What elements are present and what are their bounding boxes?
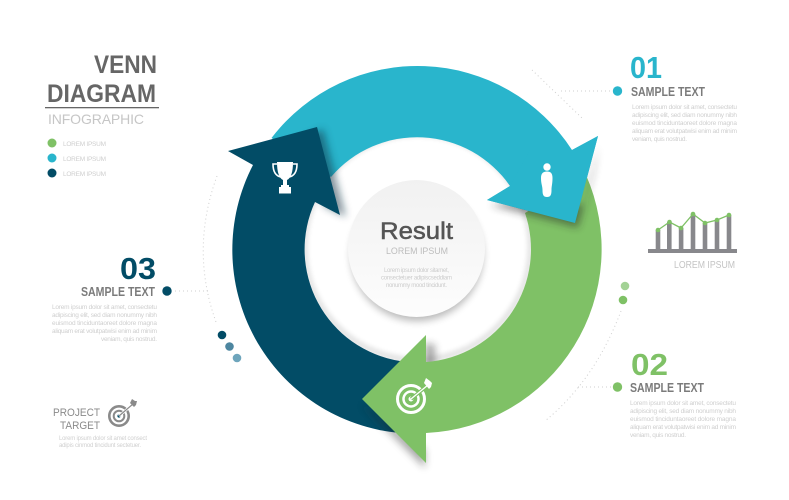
section 03: 03: [120, 251, 156, 286]
arrow: green: [362, 175, 602, 463]
section 02: aliquam erat volutpatwisi enim ad minim: [630, 424, 736, 431]
title: VENN: [94, 51, 157, 79]
section 03: [52, 176, 241, 362]
section 03: aliquam erat volutpatwisi enim ad minim: [52, 328, 157, 335]
icon: target grey: [109, 399, 137, 426]
project target: PROJECT: [53, 407, 100, 419]
icon: trophy: [273, 162, 297, 194]
chart: bars and line: [648, 212, 737, 271]
section 02: [545, 282, 736, 439]
icon: person: [541, 163, 552, 197]
section 01: Lorem ipsum dolor sit amet, consectetu: [632, 104, 737, 111]
icon: target white: [398, 378, 432, 412]
section 01: SAMPLE TEXT: [631, 84, 705, 99]
section 03: adipiscing elit, sed diam nonummy nibh: [52, 312, 157, 319]
title: [45, 51, 159, 127]
project target: [53, 399, 147, 449]
section 01: veniam, quis nostrud.: [632, 136, 687, 143]
legend: [48, 138, 106, 178]
section 03: SAMPLE TEXT: [81, 284, 155, 299]
central circle: nonummy mood tincidunt.: [386, 283, 447, 289]
section 01: 01: [630, 50, 662, 85]
section 02: Lorem ipsum dolor sit amet, consectetu: [630, 400, 736, 407]
legend: LOREM IPSUM: [63, 156, 106, 163]
section 01: [532, 50, 737, 143]
legend: LOREM IPSUM: [63, 141, 106, 148]
title: INFOGRAPHIC: [48, 111, 144, 127]
arrow: teal: [272, 66, 598, 223]
section 03: euismod tinciduntaoreet dolore magna: [52, 320, 157, 327]
section 02: 02: [631, 347, 668, 382]
result heading: Result: [380, 218, 453, 245]
panel: cycle arrows: [228, 66, 602, 468]
section 02: veniam, quis nostrud.: [630, 432, 686, 439]
project target: adipis cinmod tincidunt sectetuer.: [59, 443, 141, 449]
central circle: LOREM IPSUM: [386, 246, 448, 257]
section 01: adipiscing elit, sed diam nonummy nibh: [632, 112, 737, 119]
central circle: consectetuer adipiscseddiam: [381, 276, 452, 282]
section 03: Lorem ipsum dolor sit amet, consectetu: [52, 304, 157, 311]
title: DIAGRAM: [47, 80, 156, 108]
arrow: dark blue: [228, 127, 400, 433]
section 02: euismod tinciduntaoreet dolore magna: [630, 416, 736, 423]
legend: LOREM IPSUM: [63, 171, 106, 178]
project target: TARGET: [60, 420, 100, 432]
section 02: SAMPLE TEXT: [630, 380, 704, 395]
section 01: euismod tinciduntaoreet dolore magna: [632, 120, 737, 127]
project target: Lorem ipsum dolor sit amet consect: [59, 436, 147, 442]
section 01: aliquam erat volutpatwisi enim ad minim: [632, 128, 737, 135]
central circle: [348, 180, 485, 321]
section 02: adipiscing elit, sed diam nonummy nibh: [630, 408, 736, 415]
section 03: veniam, quis nostrud.: [101, 336, 157, 343]
chart: bars and line: LOREM IPSUM: [674, 260, 735, 271]
arrow head: teal: [487, 136, 598, 223]
central circle: Lorem ipsum dolor sitamet,: [384, 268, 449, 274]
